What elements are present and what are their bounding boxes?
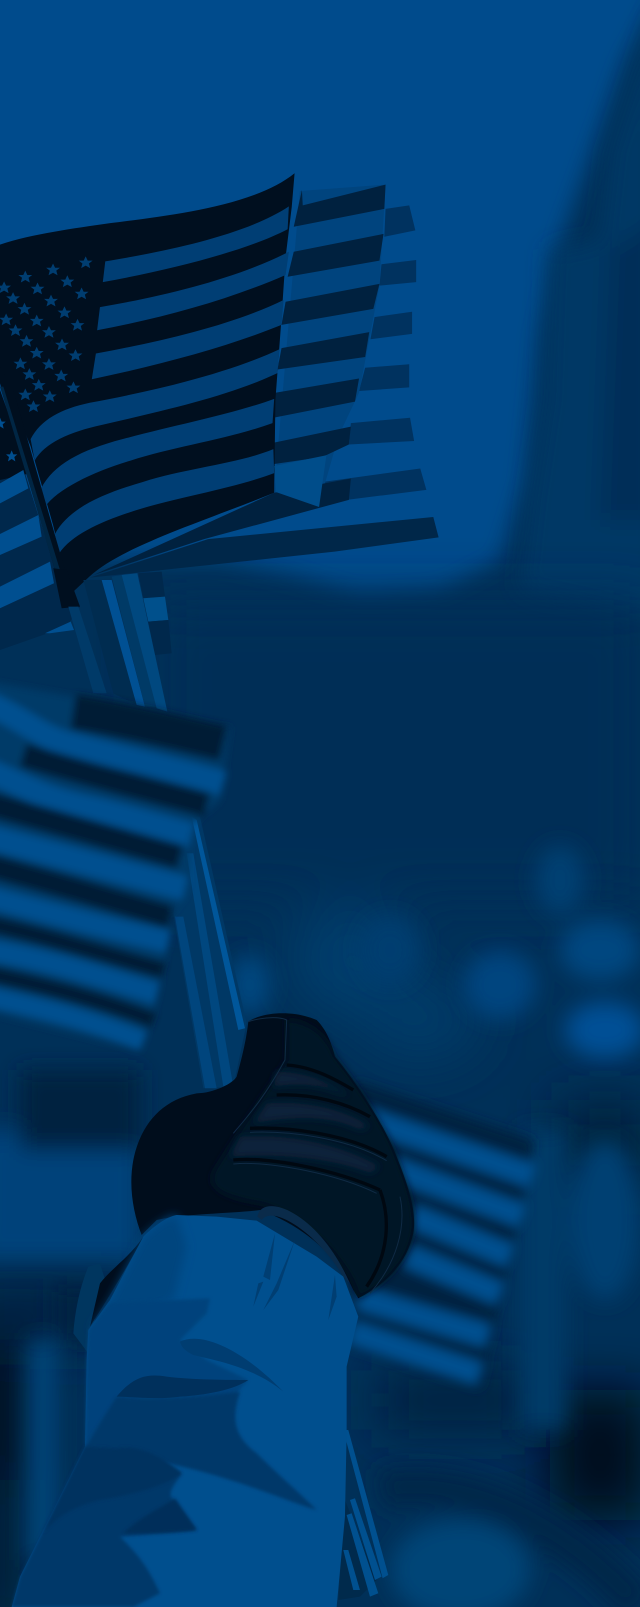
sleeve: dark crease band bbox=[117, 1376, 248, 1398]
small stripes under the flag bbox=[138, 572, 165, 598]
flag: sharp flag group bbox=[0, 173, 439, 593]
light stripes bbox=[31, 206, 289, 553]
sleeve: shadow near lower fold bbox=[123, 1498, 197, 1533]
stars bbox=[0, 256, 93, 412]
stick bundle bbox=[83, 580, 140, 707]
glow right of sticks bbox=[230, 955, 270, 1015]
sleeve: main lower fold bbox=[12, 1392, 317, 1607]
middle panel of the flag bbox=[274, 185, 386, 507]
glove: highlights bbox=[230, 1072, 380, 1173]
sleeve: crescent fold bbox=[180, 1339, 283, 1392]
left flag: light stripes bbox=[0, 703, 223, 1042]
left flag: base bbox=[0, 680, 230, 1050]
flag sticks, lower section bbox=[173, 817, 247, 1088]
main flag pole bbox=[0, 387, 60, 570]
glove: thin seam edges bbox=[233, 1018, 402, 1293]
sleeve: inner dark fold bbox=[43, 1447, 182, 1533]
glove bbox=[131, 1013, 414, 1298]
far back stripes bbox=[318, 205, 426, 507]
second flag: stars bbox=[0, 418, 17, 461]
flag: left blurred flag bbox=[0, 680, 230, 1050]
sticks below the sleeve bbox=[338, 1430, 388, 1600]
sleeve bbox=[12, 1215, 358, 1607]
second flag: light stripes bbox=[0, 470, 74, 633]
street blobs bbox=[0, 600, 640, 1607]
glove: cuff strap bbox=[257, 1206, 350, 1283]
glove: lit quilted panel bbox=[212, 1020, 414, 1298]
right-hand light stripe edges of main flag bbox=[274, 455, 326, 507]
second flag: dark field bbox=[0, 417, 80, 650]
flag: right blurred flag behind hand bbox=[351, 1080, 534, 1388]
sleeve: base bbox=[12, 1215, 358, 1607]
main flag body bbox=[0, 173, 295, 593]
second flag at far left, with pole and sticks bbox=[0, 367, 172, 712]
sleeve: soft upper shading bbox=[90, 1215, 187, 1330]
left flag: dark stripes bbox=[0, 712, 223, 1020]
sky bbox=[0, 0, 640, 595]
top-right building bbox=[520, 0, 640, 620]
sleeve: creases on cuff bbox=[253, 1233, 337, 1320]
black gap beside pole bbox=[0, 367, 65, 570]
sleeve: side tab bbox=[73, 1263, 107, 1353]
glove: quilting seams bbox=[233, 1065, 387, 1287]
